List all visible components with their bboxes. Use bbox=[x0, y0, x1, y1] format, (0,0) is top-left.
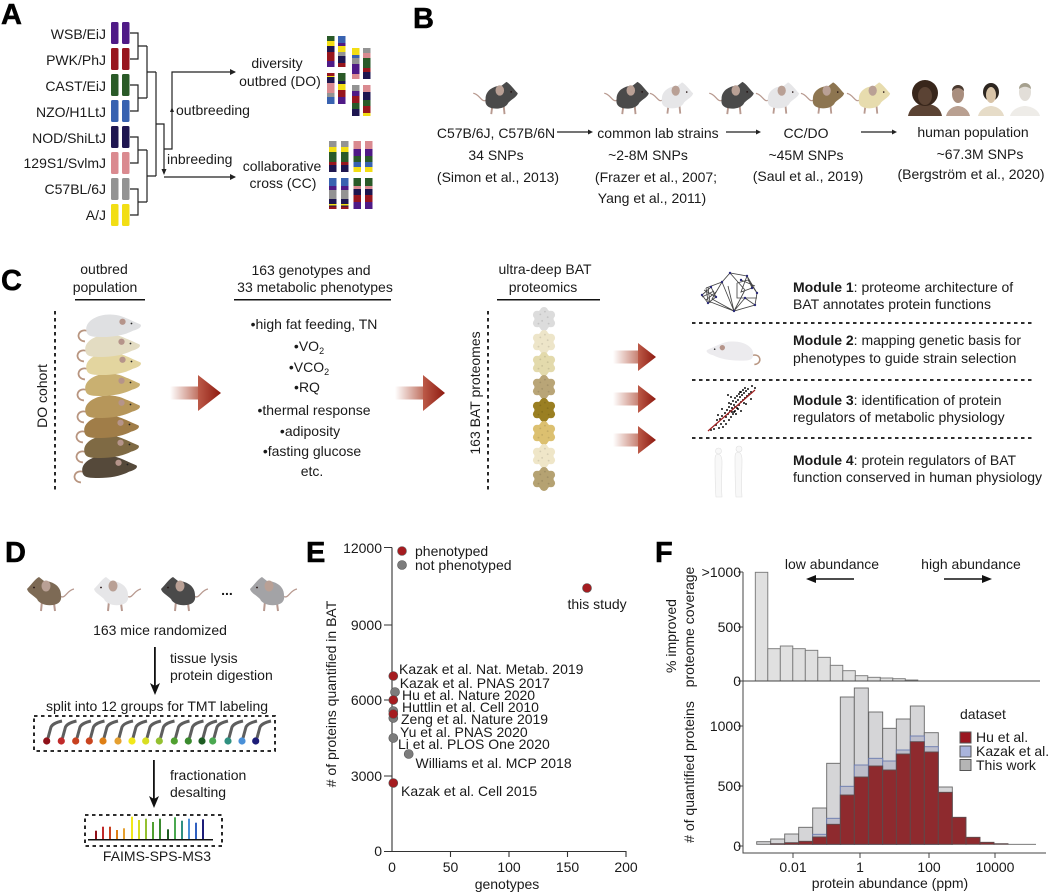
legend bbox=[960, 706, 1049, 773]
x tick labels bbox=[388, 859, 638, 875]
bottom y labels: 1000 bbox=[710, 718, 741, 734]
legend: dataset bbox=[960, 706, 1006, 722]
top histogram bbox=[702, 564, 1040, 689]
text: human population: ~67.3M SNPs bbox=[937, 146, 1023, 162]
y tick labels: 9000 bbox=[351, 617, 382, 633]
breeding labels: inbreeding bbox=[167, 151, 232, 167]
Kazak bars bbox=[813, 736, 938, 844]
text: C57B strains: (Simon et al., 2013) bbox=[437, 169, 559, 185]
arrows bbox=[557, 130, 897, 134]
founder chromosome bars bbox=[111, 22, 130, 226]
panel B: SNP diversity comparison bbox=[413, 3, 1045, 206]
x tick labels: 150 bbox=[556, 859, 579, 875]
text: mice randomized: 163 mice randomized bbox=[93, 622, 227, 638]
x tick labels: 10000 bbox=[976, 859, 1015, 875]
x tick labels bbox=[779, 859, 1015, 875]
phenotype list: etc. bbox=[301, 463, 323, 479]
legend: not phenotyped bbox=[415, 557, 512, 573]
y tick labels: 0 bbox=[374, 843, 382, 859]
total bars bbox=[757, 688, 952, 844]
panel F: abundance histograms bbox=[655, 537, 1049, 891]
module 2 text bbox=[793, 332, 1021, 366]
module 4 text: function conserved in human physiology bbox=[793, 469, 1042, 485]
icon: network bbox=[701, 272, 758, 312]
bottom y labels bbox=[710, 718, 741, 854]
panel C: study design bbox=[1, 261, 1042, 497]
x title: protein abundance (ppm) bbox=[812, 875, 968, 891]
top histogram: >1000 bbox=[702, 564, 741, 580]
bottom y title: # of quantified proteins bbox=[681, 701, 697, 843]
module 1 text: BAT annotates protein functions bbox=[793, 296, 991, 312]
abundance direction labels bbox=[785, 556, 1021, 583]
module 3 text: regulators of metabolic physiology bbox=[793, 409, 1005, 425]
phenotype list: •adiposity bbox=[280, 423, 340, 439]
text: fractionation: fractionation bbox=[170, 767, 246, 783]
text: common lab strains: Yang et al., 2011) bbox=[598, 190, 706, 206]
breeding labels: outbreeding bbox=[176, 102, 250, 118]
data labels: Zeng et al. Nature 2019 bbox=[401, 711, 548, 727]
phenotype list: 2 bbox=[319, 346, 324, 356]
phenotype list: •VCO bbox=[289, 359, 324, 375]
x tick labels: 100 bbox=[497, 859, 521, 875]
panel letter B: B bbox=[413, 3, 434, 35]
text: fractionation bbox=[170, 767, 246, 800]
data labels: Kazak et al. Nat. Metab. 2019 bbox=[399, 661, 584, 677]
heading: genotypes and phenotypes: 33 metabolic phenotypes bbox=[237, 279, 393, 295]
text: human population: (Bergström et al., 2020) bbox=[897, 166, 1045, 182]
panel letter F: F bbox=[655, 537, 673, 569]
DO chromosomes bbox=[327, 36, 370, 116]
icons: mice bbox=[473, 82, 890, 114]
text: CC/DO: ~45M SNPs bbox=[768, 147, 844, 163]
heading: proteomics: ultra-deep BAT bbox=[498, 261, 592, 277]
DO cohort label: DO cohort bbox=[34, 364, 50, 428]
heading: outbred population bbox=[73, 261, 145, 300]
module 4 text: Module 4: protein regulators of BAT bbox=[793, 452, 1016, 468]
heading: outbred population: population bbox=[73, 279, 137, 295]
text: digestion: protein digestion bbox=[170, 667, 273, 683]
axis titles bbox=[323, 600, 539, 892]
text: common lab strains bbox=[595, 125, 719, 206]
heading: proteomics: proteomics bbox=[509, 279, 577, 295]
text: C57B strains: C57B/6J, C57B/6N bbox=[437, 125, 555, 141]
arrow to proteomics bbox=[395, 375, 445, 411]
x tick labels: 100 bbox=[917, 859, 941, 875]
top y title bbox=[663, 566, 697, 687]
text: common lab strains: common lab strains bbox=[597, 125, 719, 141]
text: human population: human population bbox=[917, 124, 1029, 140]
top y title: proteome coverage bbox=[681, 566, 697, 687]
panel letter D: D bbox=[5, 537, 26, 569]
axis titles: genotypes bbox=[475, 876, 539, 892]
phenotype list: •VO bbox=[294, 338, 319, 354]
phenotype list: 2 bbox=[324, 367, 329, 377]
module 2 text: Module 2: mapping genetic basis for bbox=[793, 332, 1021, 348]
founder strain labels: WSB/EiJ bbox=[51, 26, 106, 42]
data labels: Williams et al. MCP 2018 bbox=[416, 755, 572, 771]
text: common lab strains: ~2-8M SNPs bbox=[608, 147, 688, 163]
legend: phenotyped bbox=[415, 543, 488, 559]
legend: This work bbox=[976, 757, 1037, 773]
data labels: Huttlin et al. Cell 2010 bbox=[402, 699, 539, 715]
legend: Hu et al. bbox=[976, 729, 1028, 745]
module 3 text: Module 3: identification of protein bbox=[793, 392, 1002, 408]
text: common lab strains: (Frazer et al., 2007; bbox=[595, 169, 717, 185]
heading: proteomics bbox=[497, 261, 600, 300]
founder strain labels: NOD/ShiLtJ bbox=[32, 130, 106, 146]
arrow to phenotypes bbox=[170, 375, 221, 411]
data labels: Hu et al. Nature 2020 bbox=[402, 687, 535, 703]
text: digestion: tissue lysis bbox=[170, 650, 238, 666]
text: C57B strains bbox=[437, 125, 559, 185]
founder strain labels bbox=[24, 26, 106, 223]
text: TMT: split into 12 groups for TMT labeling bbox=[46, 698, 268, 714]
outcome labels: outbred (DO) bbox=[239, 73, 321, 89]
arrowheads bbox=[162, 69, 236, 180]
x tick labels: 1 bbox=[856, 859, 864, 875]
top histogram: 0 bbox=[733, 673, 741, 689]
bottom axes bbox=[738, 681, 1046, 858]
data labels: Yu et al. PNAS 2020 bbox=[400, 724, 528, 740]
x tick labels: 0 bbox=[388, 859, 396, 875]
y tick labels: 3000 bbox=[351, 768, 382, 784]
module 1 text: Module 1: proteome architecture of bbox=[793, 279, 1013, 295]
text: CC/DO: CC/DO bbox=[783, 125, 829, 141]
bottom y labels: 0 bbox=[733, 838, 741, 854]
heading: outbred population: outbred bbox=[80, 261, 128, 277]
breeding labels bbox=[167, 102, 250, 167]
arrow: digestion bbox=[150, 647, 160, 695]
x tick labels: 0.01 bbox=[779, 859, 807, 875]
text: human population bbox=[897, 124, 1045, 182]
text: digestion bbox=[170, 650, 273, 683]
text: CC/DO: (Saul et al., 2019) bbox=[753, 168, 863, 184]
data labels: this study bbox=[568, 596, 627, 612]
CC chromosomes bbox=[329, 141, 372, 209]
founder strain labels: A/J bbox=[86, 207, 106, 223]
spectrum box bbox=[85, 815, 222, 846]
arrows to modules bbox=[613, 343, 656, 454]
text: CC/DO bbox=[753, 125, 863, 184]
data points bbox=[389, 584, 592, 788]
founder strain labels: CAST/EiJ bbox=[45, 78, 106, 94]
text: fractionation: desalting bbox=[170, 784, 226, 800]
panel letter E: E bbox=[306, 537, 325, 569]
module 2 text: phenotypes to guide strain selection bbox=[793, 350, 1016, 366]
axes bbox=[384, 548, 626, 857]
icon: scatter plot bbox=[708, 386, 755, 431]
top histogram: 500 bbox=[718, 619, 741, 635]
legend bbox=[398, 543, 512, 573]
founder strain labels: 129S1/SvlmJ bbox=[24, 155, 106, 171]
panel letter C: C bbox=[1, 265, 22, 297]
phenotype list bbox=[251, 316, 377, 479]
data labels: Kazak et al. PNAS 2017 bbox=[400, 675, 550, 691]
heading: genotypes and phenotypes bbox=[234, 262, 393, 300]
bottom histogram bbox=[757, 688, 1036, 844]
outcome labels: diversity bbox=[251, 55, 303, 71]
phenotype list: •RQ bbox=[294, 379, 320, 395]
phenotype list: •high fat feeding, TN bbox=[251, 316, 377, 332]
y tick labels bbox=[343, 540, 382, 859]
phenotype list: •thermal response bbox=[257, 402, 371, 418]
TMT dashed box with tubes bbox=[34, 716, 275, 751]
outcome labels bbox=[239, 55, 322, 191]
data labels bbox=[398, 596, 627, 799]
icon: white mouse bbox=[707, 341, 760, 364]
founder strain labels: PWK/PhJ bbox=[46, 52, 106, 68]
arrow: fractionation bbox=[149, 760, 159, 808]
founder strain labels: C57BL/6J bbox=[45, 181, 106, 197]
tissue blobs bbox=[533, 307, 555, 491]
axis titles: # of proteins quantified in BAT bbox=[323, 600, 339, 787]
x tick labels: 200 bbox=[614, 859, 638, 875]
founder strain labels: NZO/H1LtJ bbox=[36, 104, 106, 120]
Hu bars bbox=[771, 742, 1008, 844]
bottom y labels: 500 bbox=[718, 778, 741, 794]
outcome labels: cross (CC) bbox=[250, 175, 316, 191]
module 1 text bbox=[793, 279, 1013, 312]
top y title: % improved bbox=[663, 599, 679, 673]
heading: genotypes and phenotypes: 163 genotypes and bbox=[251, 262, 371, 278]
BAT proteomes label: 163 BAT proteomes bbox=[467, 331, 483, 455]
stacked mice bbox=[75, 315, 141, 482]
icons: mice row: ... bbox=[221, 582, 233, 598]
panel A: founder strains and breeding bbox=[1, 0, 372, 226]
phenotype list: •fasting glucose bbox=[263, 443, 361, 459]
data labels: Kazak et al. Cell 2015 bbox=[401, 783, 537, 799]
y tick labels: 6000 bbox=[351, 692, 382, 708]
dye dots bbox=[43, 737, 259, 745]
icon: human bodies bbox=[715, 446, 742, 497]
module list bbox=[793, 279, 1042, 485]
panel E: scatter chart bbox=[306, 537, 638, 892]
icons: human faces bbox=[908, 80, 1040, 116]
module 4 text bbox=[793, 452, 1042, 485]
text: C57B strains: 34 SNPs bbox=[468, 147, 524, 163]
module 3 text bbox=[793, 392, 1005, 425]
y tick labels: 12000 bbox=[343, 540, 382, 556]
legend: Kazak et al. bbox=[976, 743, 1049, 759]
data labels: Li et al. PLOS One 2020 bbox=[398, 736, 550, 752]
tubes bbox=[48, 721, 271, 738]
breeding tree bbox=[130, 33, 235, 215]
text: FAIMS: FAIMS-SPS-MS3 bbox=[103, 848, 211, 864]
abundance direction labels: low abundance bbox=[785, 556, 879, 572]
panel D: workflow bbox=[5, 537, 297, 864]
abundance direction labels: high abundance bbox=[921, 556, 1021, 572]
outcome labels: collaborative bbox=[243, 158, 322, 174]
icons: mice row bbox=[27, 577, 297, 611]
x tick labels: 50 bbox=[443, 859, 458, 875]
